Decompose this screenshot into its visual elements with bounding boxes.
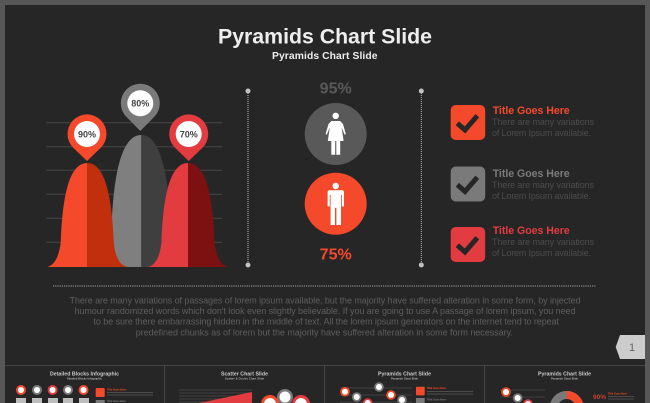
paragraph: There are many variations of passages of lorem ipsum available, but the majority have suffered alteration in some form, by injected: [70, 295, 580, 305]
thumbnail 1: blocks: [16, 372, 153, 403]
page number tag: 1: [629, 342, 635, 354]
thumbnail 3: pyramids: Title Goes Here: [427, 386, 446, 390]
thumbnail 4: donut: Title Goes Here: [608, 392, 627, 396]
list item 3: Title Goes Here: [493, 225, 570, 237]
list item 1: There are many variations: [492, 117, 594, 127]
pin 90%: [68, 114, 106, 161]
list item 1: [451, 105, 594, 140]
icon: male: [305, 173, 367, 235]
list item 2: of Lorem Ipsum available.: [492, 191, 591, 201]
orange pyramid 90%: [47, 163, 127, 267]
pin 80%: 80%: [131, 99, 149, 109]
icon: female: [305, 103, 367, 165]
thumbnail 2: scatter: Scatter & Circles Chart Slide: [225, 376, 265, 380]
list item 2: Title Goes Here: [493, 168, 570, 180]
pin 70%: 70%: [180, 129, 198, 139]
pin 70%: [169, 114, 208, 161]
list item 2: [451, 166, 594, 202]
thumbnail 2: scatter: Scatter Chart Slide: [221, 372, 268, 378]
stat 75%: 75%: [320, 246, 352, 264]
thumbnail 3: pyramids: Pyramids Chart Slide: [391, 376, 419, 380]
divider right: [419, 88, 424, 268]
pin 80%: [121, 84, 160, 131]
thumbnail 3: pyramids: Pyramids Chart Slide: [378, 372, 431, 378]
list item 1: Title Goes Here: [493, 105, 570, 117]
stat 95%: 95%: [320, 80, 352, 98]
thumbnail 4: donut: Pyramids Chart Slide: [538, 372, 591, 378]
list item 1: of Lorem Ipsum available.: [492, 128, 591, 138]
list item 2: There are many variations: [492, 180, 594, 190]
thumbnail 1: blocks: Title Goes Here: [107, 388, 126, 392]
thumbnail 2: scatter: [179, 372, 310, 403]
paragraph: humour randomized words which don't look even slightly believable. If you are going to use A passage of lorem ipsum, you need: [74, 306, 576, 316]
list item 3: [451, 225, 594, 262]
list item 3: of Lorem Ipsum available.: [492, 248, 591, 258]
gray pyramid 80%: [95, 135, 187, 267]
thumbnail 1: blocks: Detailed Blocks Infographic: [50, 372, 119, 378]
thumbnail 4: donut: [500, 372, 634, 403]
page number tag: [616, 335, 645, 359]
thumbnail 1: blocks: Detailed Blocks Infographic: [67, 376, 103, 380]
thumbnail 3: pyramids: [340, 372, 473, 403]
thumbnail strip: [5, 365, 645, 403]
list item 3: There are many variations: [492, 237, 594, 247]
thumbnail 3: pyramids: Title Goes Here: [427, 398, 446, 402]
thumbnail 4: donut: Pyramids Chart Slide: [551, 376, 579, 380]
thumbnail 4: donut: 90%: [593, 394, 606, 401]
paragraph: [70, 295, 580, 337]
paragraph: predefined chunks as of lorem but the majority have suffered alteration in some form necessary.: [136, 327, 513, 337]
pyramids chart: [46, 84, 228, 267]
divider left: [246, 88, 250, 268]
title: Pyramids Chart Slide: [218, 25, 432, 49]
pin 90%: 90%: [78, 129, 96, 139]
subtitle: Pyramids Chart Slide: [272, 51, 378, 62]
paragraph: to be sure there embarrassing hidden in the middle of text. All the lorem ipsum generators on the internet tend to repeat: [94, 317, 559, 327]
thumbnail 1: blocks: Title Goes Here: [107, 399, 126, 403]
red pyramid 70%: [148, 163, 228, 267]
